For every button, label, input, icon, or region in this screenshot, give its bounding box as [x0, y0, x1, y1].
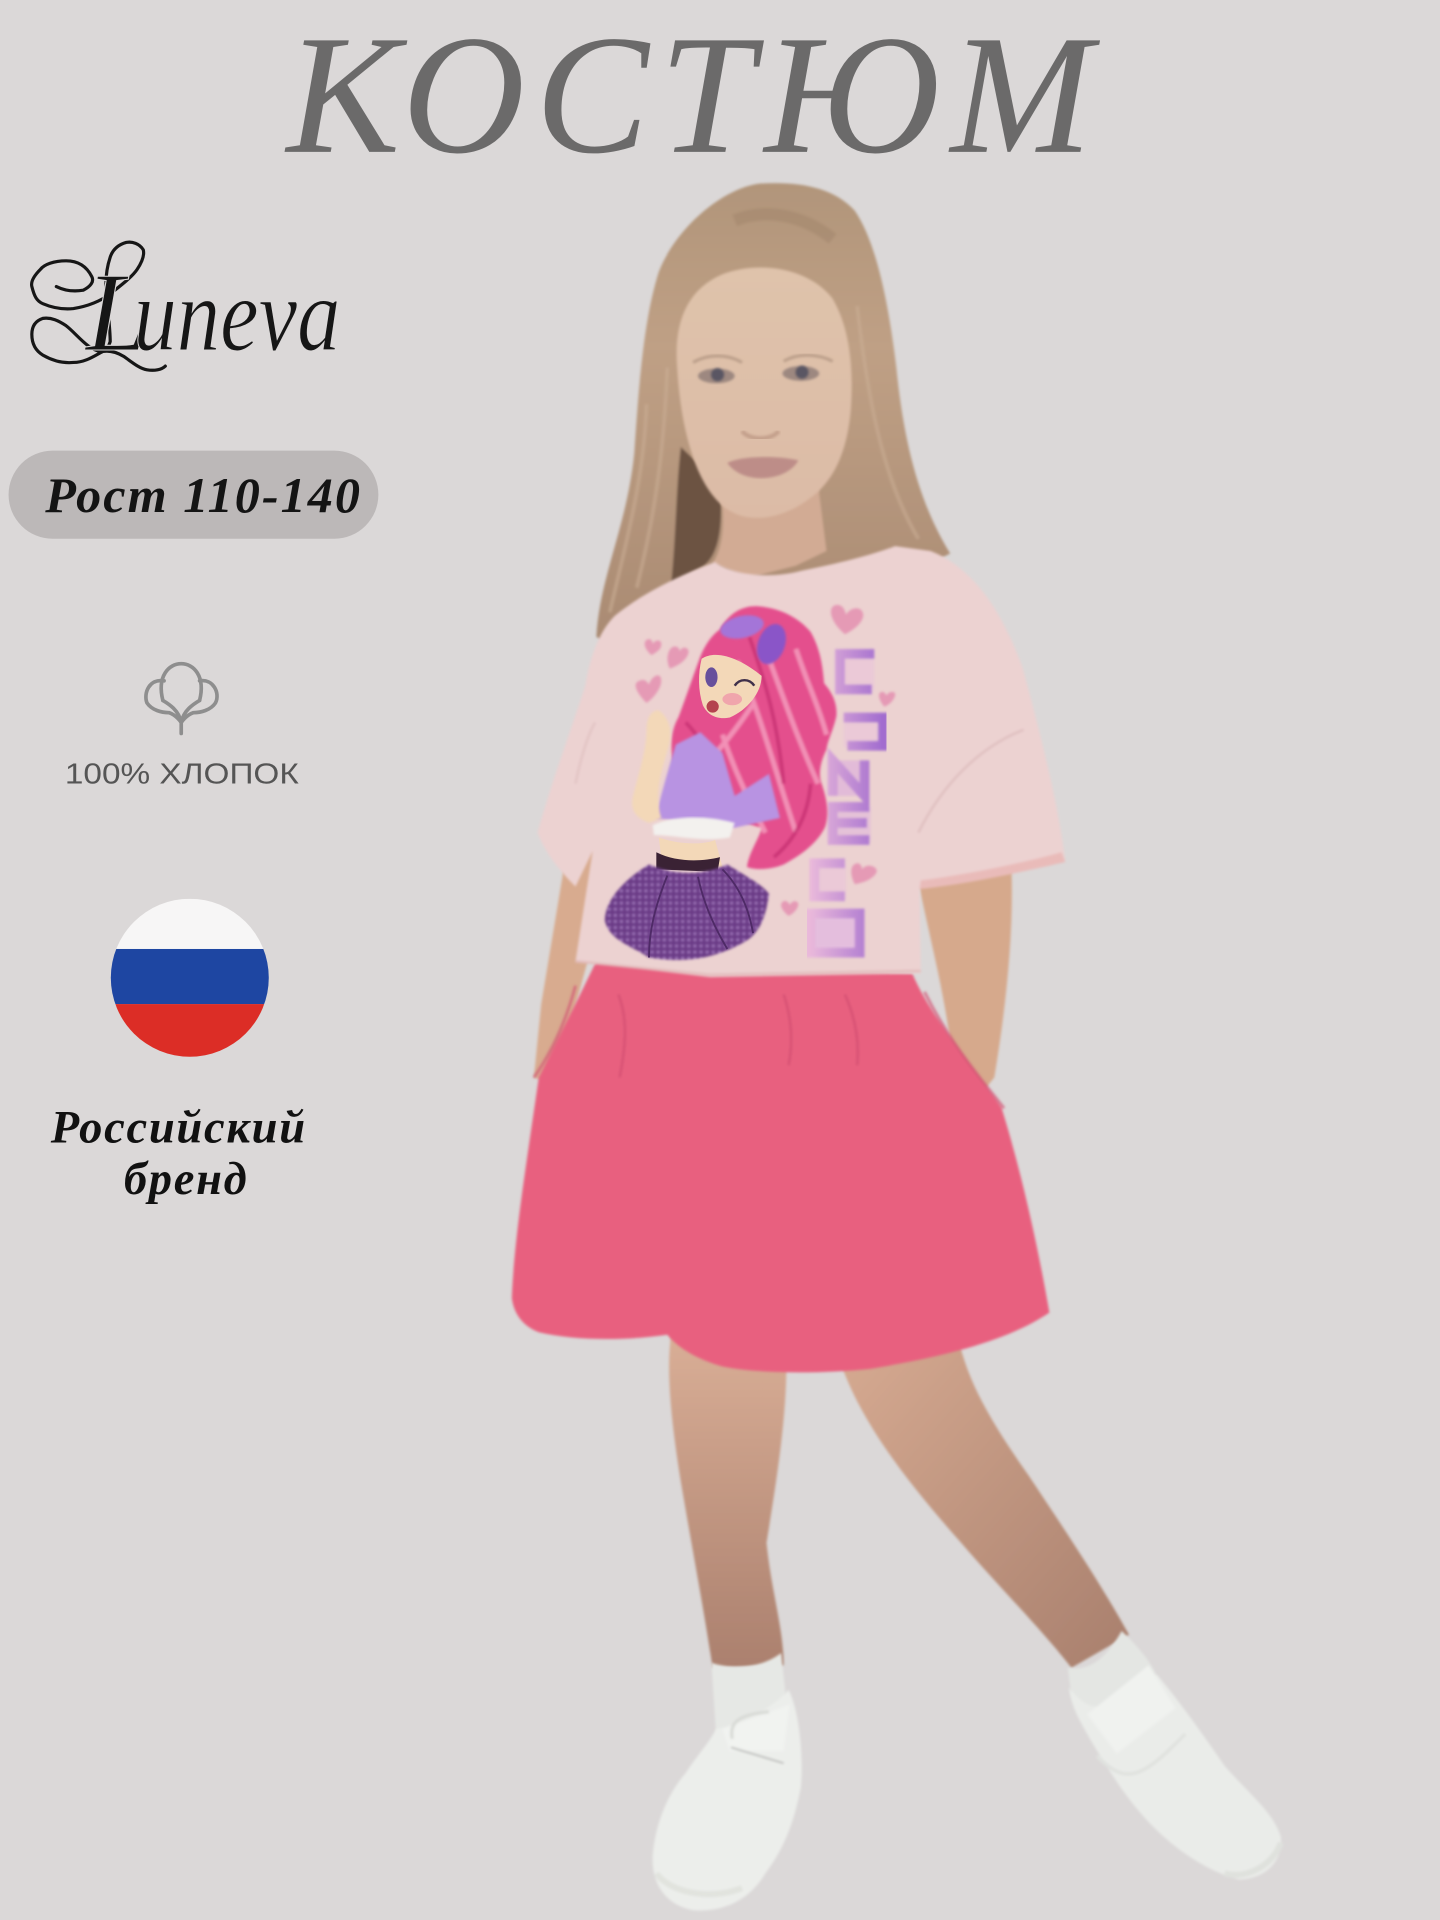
print: waistband: [656, 852, 720, 872]
left shoe: [653, 1690, 802, 1911]
logo: Luneva script: L: [84, 251, 148, 375]
shirt print: anime girl: [605, 605, 895, 960]
print: hair: [671, 606, 837, 869]
print: purple top: [655, 732, 780, 828]
logo: Luneva script: [32, 242, 340, 375]
print: raised arm: [632, 710, 670, 823]
right sock: [1068, 1631, 1158, 1739]
height badge: Рост 110-140: [44, 467, 360, 523]
left sock: [711, 1653, 789, 1739]
icon: Russian flag: [110, 899, 269, 1058]
face: [677, 268, 852, 518]
label: Russian brand: Российский: [50, 1102, 307, 1153]
logo: Luneva script: uneva: [133, 256, 340, 373]
height badge: [9, 451, 378, 539]
print: skirt: [605, 864, 769, 960]
shorts: [512, 961, 1049, 1372]
label: Russian brand: бренд: [124, 1154, 248, 1205]
print: hearts: [636, 605, 895, 916]
print: face: [699, 655, 762, 718]
mouth: [727, 457, 798, 478]
left leg: [669, 1335, 786, 1668]
label: 100% cotton: 100% ХЛОПОК: [65, 759, 299, 791]
right shoe: [1069, 1665, 1281, 1880]
print: lettering blocks: [811, 654, 883, 953]
t-shirt: [538, 546, 1065, 977]
left arm: [534, 845, 600, 1084]
title: КОСТЮМ: [285, 0, 1100, 189]
nose: [742, 431, 779, 438]
neck: [713, 484, 827, 578]
icon: cotton boll: [146, 664, 217, 733]
right arm: [918, 867, 1012, 1108]
print: midriff: [659, 838, 722, 867]
eyes and brows: [693, 355, 833, 383]
hair back: [596, 183, 950, 649]
right leg: [838, 1335, 1129, 1668]
print: sunglasses: [718, 612, 791, 668]
print: white frill: [653, 817, 735, 839]
photo: girl in the suit: [512, 183, 1281, 1911]
